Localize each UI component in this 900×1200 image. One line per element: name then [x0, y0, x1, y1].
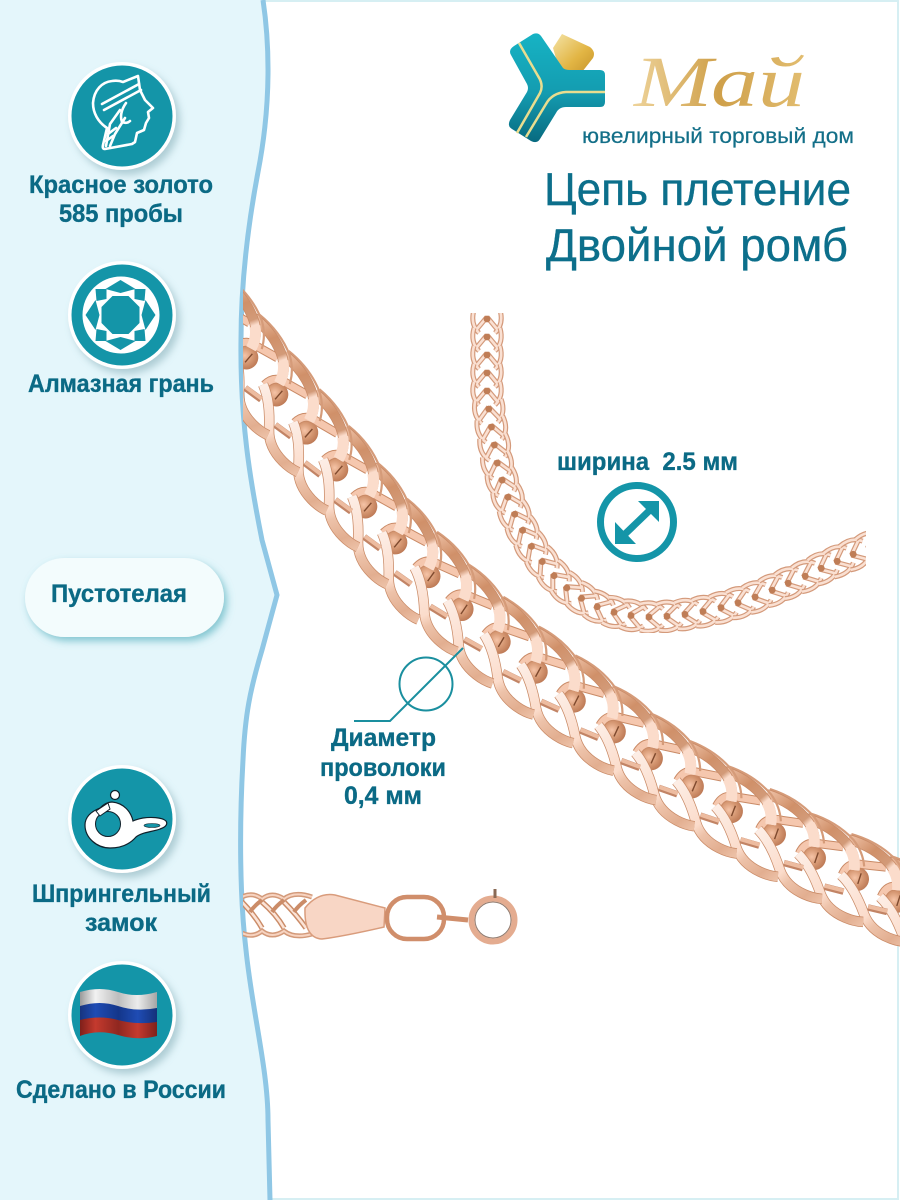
callout: width label: ширина 2.5 мм — [557, 448, 738, 476]
chain: large close-up — [243, 289, 900, 946]
label: red gold — [29, 171, 213, 228]
pill: hollow: Пустотелая — [51, 580, 187, 608]
callout: wire diameter label: проволоки — [320, 754, 446, 782]
pill: hollow — [25, 558, 224, 637]
clasp cap — [305, 895, 385, 939]
badge: russian flag icon — [68, 961, 176, 1069]
label: red gold: Красное золото — [29, 171, 213, 199]
callout: wire diameter label — [320, 724, 446, 810]
badge: diamond cut icon — [68, 261, 176, 369]
callout: wire diameter label: Диаметр — [331, 724, 436, 752]
icon: wire diameter — [354, 648, 463, 721]
label: red gold: 585 пробы — [59, 200, 183, 228]
label: diamond cut: Алмазная грань — [28, 370, 214, 398]
chain with clasp — [240, 889, 514, 942]
logo: wordmark: Май — [633, 42, 805, 122]
label: spring clasp: замок — [85, 909, 157, 937]
spring ring — [472, 889, 514, 942]
badge: spring clasp icon — [68, 765, 176, 873]
title: Двойной ромб — [546, 219, 848, 271]
badge: red gold helmet icon — [68, 62, 176, 170]
title: Цепь плетение — [544, 163, 851, 215]
panel: left wave sidebar — [0, 0, 277, 1200]
title — [544, 163, 851, 271]
logo: tagline: ювелирный торговый дом — [582, 125, 854, 148]
chain: small full view — [473, 310, 888, 632]
icon: width arrow — [600, 486, 674, 558]
clasp connector — [437, 917, 468, 920]
label: spring clasp: Шпрингельный — [32, 880, 211, 908]
logo: emblem — [509, 33, 605, 142]
clasp oval ring — [387, 897, 444, 939]
callout: wire diameter label: 0,4 мм — [344, 782, 422, 810]
label: spring clasp — [32, 880, 211, 937]
label: made in russia: Сделано в России — [16, 1076, 226, 1104]
